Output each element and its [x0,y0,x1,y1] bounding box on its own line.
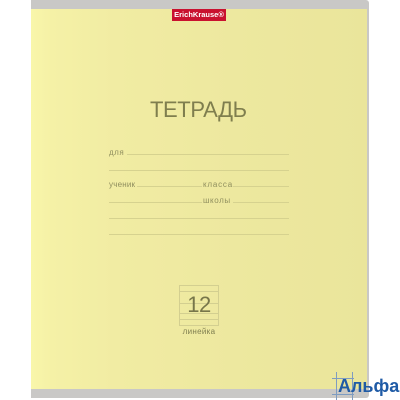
panel: notebook cover [31,9,367,389]
sheet count: 12: 12 [187,292,211,317]
form label: для: для [109,148,124,157]
title: ТЕТРАДЬ [150,97,247,122]
ruled sheet count box [179,285,219,326]
ruling label: линейка: линейка [183,327,215,336]
logo wordmark: Альфа [338,376,399,396]
form label: класса: класса [203,180,233,189]
logo crosshair [332,372,354,400]
form lines [109,154,289,235]
brand logo: ErichKrause: ErichKrause® [174,10,224,19]
watermark: Альфа logo [332,372,400,400]
form label: ученик: ученик [109,180,135,189]
form label: школы: школы [203,196,231,205]
brand logo: ErichKrause [172,9,226,21]
